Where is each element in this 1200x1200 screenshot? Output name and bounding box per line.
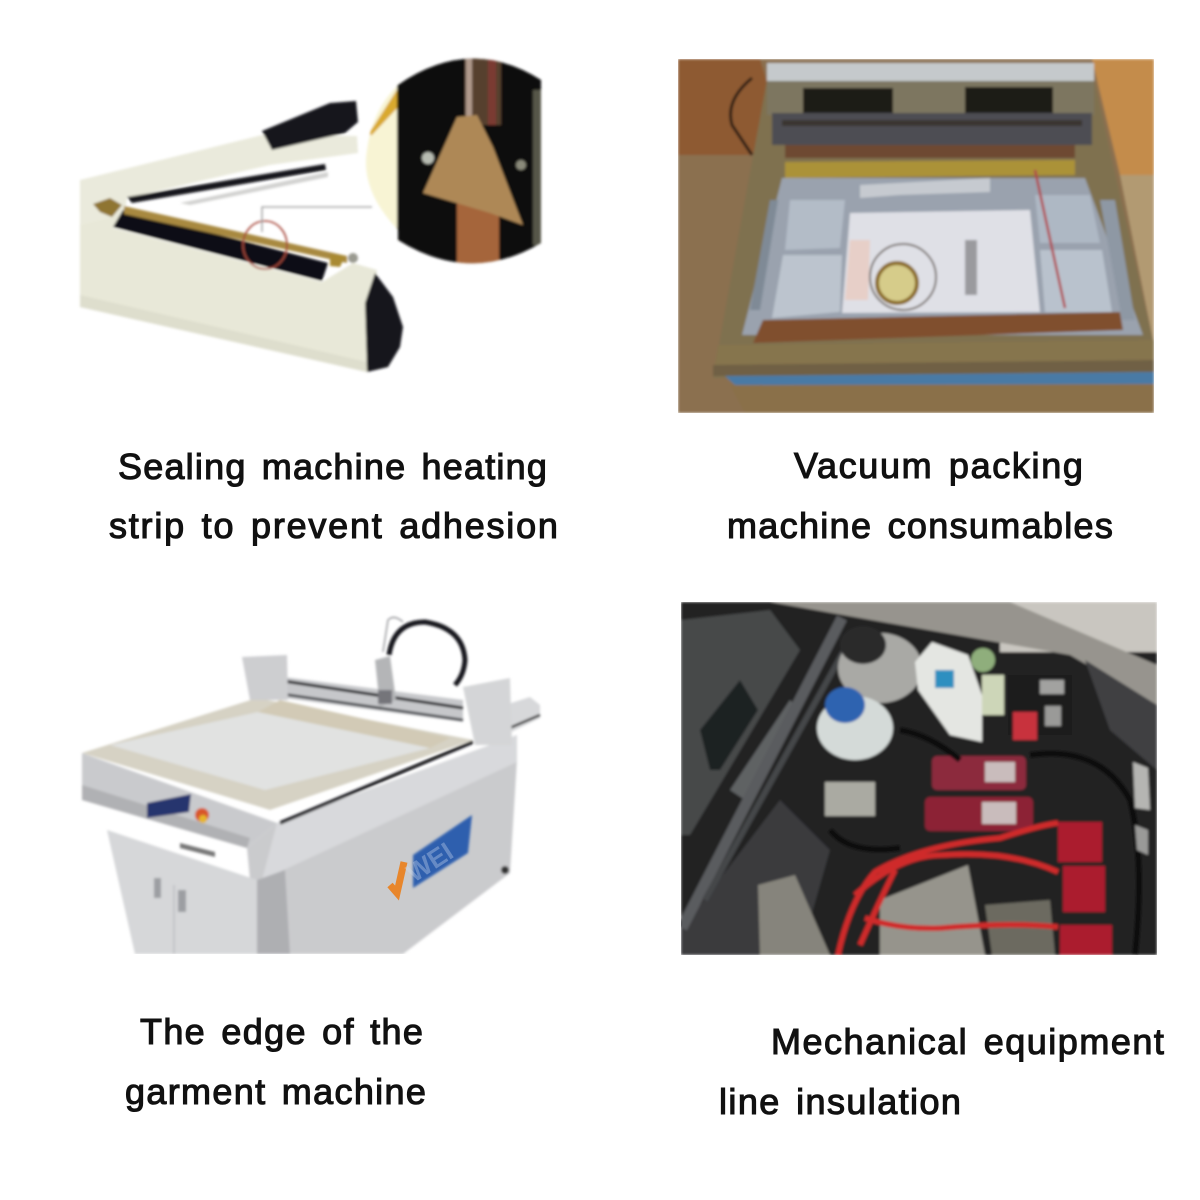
brake fluid tank: [825, 782, 875, 816]
cabinet: [107, 830, 257, 954]
left wing and grille: [681, 610, 800, 835]
battery: [1008, 675, 1072, 735]
zoom lens detail: [360, 50, 543, 270]
blue cap reservoir: [817, 696, 893, 760]
carton left: [678, 59, 768, 155]
red coils: [1058, 822, 1102, 862]
bottom carpet: [730, 385, 1154, 413]
right wing: [510, 696, 541, 732]
heading: mechanical equipment caption: [719, 1021, 1165, 1122]
machine foot: [501, 866, 509, 874]
gold heating strip: [124, 206, 347, 263]
red heating wire: [1035, 170, 1065, 308]
red boxes: [932, 756, 1026, 790]
bonnet edge: [770, 602, 1157, 705]
lid handle: [262, 101, 358, 150]
silver reservoir: [838, 633, 922, 703]
infographic canvas: [79, 56, 1164, 1115]
diagonal strut: [682, 618, 842, 928]
green cap: [971, 648, 995, 672]
logo: JWEI: WEI: [401, 836, 458, 888]
heading: sealing machine caption: [109, 446, 559, 546]
lid top bar: [767, 63, 1094, 81]
cutting head: [375, 656, 396, 707]
right inner wing: [1085, 660, 1157, 770]
blue stripe: [725, 372, 1154, 385]
red ignition wires: [838, 823, 1058, 955]
heading: vacuum packing caption: Vacuum packing: [794, 445, 1084, 486]
heating slot: [113, 210, 328, 281]
machine outer frame: [720, 86, 1152, 344]
panel: vacuum packing machine photo: [678, 59, 1154, 413]
gantry uprights: [242, 655, 288, 700]
heading: garment machine caption: garment machine: [125, 1071, 427, 1112]
heading: vacuum packing caption: [727, 445, 1114, 546]
heading: mechanical equipment caption: line insulation: [719, 1081, 962, 1122]
instruction paper: [842, 210, 1040, 313]
front console: [82, 753, 277, 848]
logo: JWEI: [390, 815, 472, 893]
red highlight circle: [243, 221, 287, 269]
heading: garment machine caption: [125, 1011, 427, 1112]
panel: car engine bay photo: [681, 602, 1157, 955]
gantry beam: [286, 676, 464, 720]
heading: garment machine caption: The edge of the: [140, 1011, 424, 1052]
table top: [82, 698, 473, 810]
heading: mechanical equipment caption: Mechanical equipment: [771, 1021, 1165, 1062]
sealer base: [80, 215, 377, 372]
cut slot: [280, 742, 473, 823]
carton right: [1092, 59, 1154, 175]
carpet background: [678, 59, 1154, 413]
heading: sealing machine caption: Sealing machine heating: [118, 446, 548, 487]
black end cap: [365, 273, 403, 372]
engine block: [880, 865, 985, 955]
engine bay base: [681, 602, 1157, 955]
heading: sealing machine caption: strip to prevent adhesion: [109, 505, 559, 546]
panel: garment cutting machine photo: [82, 617, 540, 954]
background ground: [1000, 602, 1157, 652]
lower left shroud: [681, 800, 830, 955]
gold sealing bar: [785, 160, 1075, 178]
panel: sealing machine photo: [80, 50, 543, 372]
white tank: [915, 642, 982, 742]
sealer lid: [80, 135, 358, 230]
front brown bar: [753, 312, 1123, 343]
control label: [147, 794, 191, 818]
tray: [742, 178, 1143, 335]
machine body side: [247, 760, 517, 954]
heading: vacuum packing caption: machine consumables: [727, 505, 1114, 546]
black hoses: [830, 730, 1139, 955]
